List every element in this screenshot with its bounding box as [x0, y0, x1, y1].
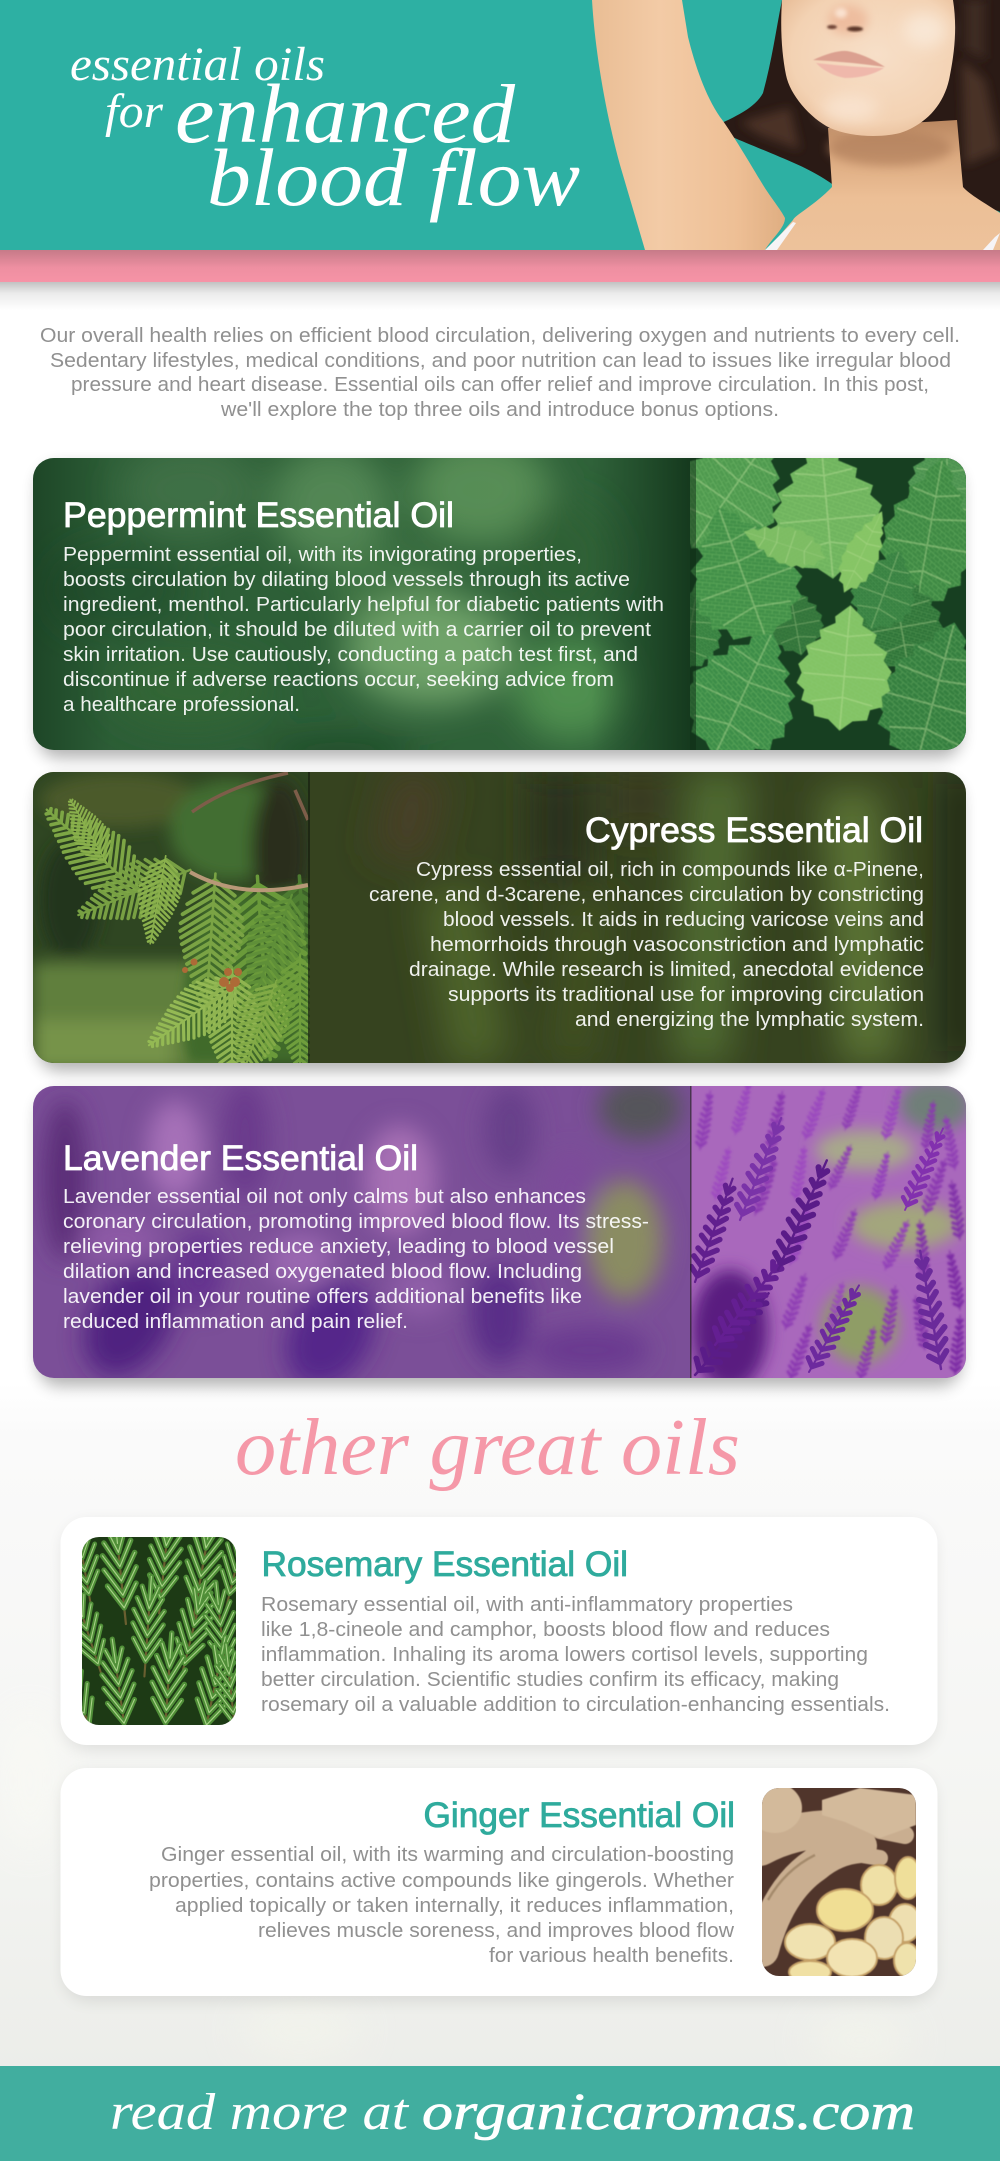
panel: ginger [60, 1768, 938, 2001]
body text: rosemary oil a valuable addition to circulation-enhancing essentials. [261, 1694, 890, 1716]
title [70, 38, 580, 223]
heading: Ginger Essential Oil [424, 1796, 735, 1835]
body text [369, 859, 924, 1031]
hair highlights [740, 0, 1000, 165]
ginger photo [762, 1788, 916, 1976]
title line: enhanced: enhanced [175, 68, 516, 161]
body text: reduced inflammation and pain relief. [63, 1311, 408, 1333]
chin highlight [822, 94, 878, 122]
hair [713, 0, 1000, 225]
photo: woman with raised arm [592, 0, 1000, 250]
body text: boosts circulation by dilating blood vessels through its active [63, 569, 630, 591]
title line: for: for [105, 85, 163, 138]
band shadow [0, 282, 1000, 310]
pink band [0, 250, 1000, 282]
body text: poor circulation, it should be diluted with a carrier oil to prevent [63, 619, 651, 641]
footer text: organicaromas.com: organicaromas.com [422, 2084, 915, 2141]
body text: Cypress essential oil, rich in compounds like α-Pinene, [416, 859, 924, 881]
body text [63, 544, 664, 716]
foliage shade [183, 885, 310, 1063]
body text: inflammation. Inhaling its aroma lowers cortisol levels, supporting [261, 1644, 868, 1666]
body text: Lavender essential oil not only calms but also enhances [63, 1186, 586, 1208]
body text: relieves muscle soreness, and improves blood flow [258, 1920, 735, 1942]
flower spikes [686, 1114, 952, 1383]
body text: and energizing the lymphatic system. [575, 1009, 924, 1031]
heading: Lavender Essential Oil [63, 1139, 418, 1178]
intro paragraph: pressure and heart disease. Essential oils can offer relief and improve circulation. In this post, [71, 374, 929, 396]
heading: Cypress Essential Oil [585, 811, 923, 850]
panel: peppermint [28, 456, 970, 768]
footer banner [0, 2066, 1000, 2161]
title line: blood flow: blood flow [207, 132, 580, 223]
face highlight [903, 12, 947, 48]
body text: supports its traditional use for improving circulation [448, 984, 924, 1006]
blurred olive background [33, 772, 966, 1063]
body text [149, 1844, 735, 1967]
intro paragraph: Our overall health relies on efficient blood circulation, delivering oxygen and nutrients to every cell. [40, 325, 960, 347]
panel: cypress [28, 772, 966, 1087]
panel: rosemary [60, 1537, 938, 1752]
body text: relieving properties reduce anxiety, leading to blood vessel [63, 1236, 614, 1258]
body text: better circulation. Scientific studies confirm its efficacy, making [261, 1669, 839, 1691]
face [781, 0, 955, 136]
cypress branch photo [33, 772, 310, 1063]
card shadow [38, 466, 961, 758]
body text: hemorrhoids through vasoconstriction and lymphatic [430, 934, 924, 956]
chin shadow [828, 130, 952, 166]
teal background [0, 0, 1000, 250]
body text: applied topically or taken internally, it reduces inflammation, [175, 1895, 734, 1917]
heading: Peppermint Essential Oil [63, 496, 454, 535]
blurred purple background [33, 1086, 966, 1378]
body text: discontinue if adverse reactions occur, seeking advice from [63, 669, 614, 691]
body text: for various health benefits. [489, 1945, 734, 1967]
body text: like 1,8-cineole and camphor, boosts blood flow and reduces [261, 1619, 830, 1641]
neck and shoulders [767, 120, 1000, 250]
body text: dilation and increased oxygenated blood flow. Including [63, 1261, 582, 1283]
intro paragraph: Sedentary lifestyles, medical conditions, and poor nutrition can lead to issues like irregular blood [50, 350, 951, 372]
strap left [765, 222, 796, 250]
strap right [983, 233, 1000, 250]
branch front [190, 872, 308, 890]
body text: properties, contains active compounds like gingerols. Whether [149, 1870, 734, 1892]
body text: a healthcare professional. [63, 694, 300, 716]
card [60, 1768, 938, 1996]
soft background spikes [695, 1081, 966, 1382]
card shadow [63, 1773, 935, 2001]
heading: Rosemary Essential Oil [262, 1545, 628, 1584]
body text: blood vessels. It aids in reducing varicose veins and [443, 909, 924, 931]
nose [827, 5, 868, 35]
body text: Peppermint essential oil, with its invigorating properties, [63, 544, 582, 566]
cones [182, 958, 242, 992]
body text: ingredient, menthol. Particularly helpful for diabetic patients with [63, 594, 664, 616]
mint leaves photo [690, 458, 966, 750]
body text: lavender oil in your routine offers additional benefits like [63, 1286, 582, 1308]
body text [261, 1594, 890, 1716]
body text: Rosemary essential oil, with anti-inflammatory properties [261, 1594, 793, 1616]
body text: drainage. While research is limited, anecdotal evidence [409, 959, 924, 981]
header banner [0, 0, 1000, 310]
intro paragraph: we'll explore the top three oils and introduce bonus options. [220, 399, 779, 421]
panel: lavender [33, 1076, 971, 1403]
footer text: read more at: read more at [110, 2084, 410, 2141]
lips [813, 51, 885, 78]
body text: coronary circulation, promoting improved blood flow. Its stress- [63, 1211, 649, 1233]
body text [63, 1186, 649, 1333]
card [60, 1517, 938, 1745]
body text: Ginger essential oil, with its warming and circulation-boosting [161, 1844, 734, 1866]
card shadow [38, 780, 961, 1071]
intro paragraph [40, 325, 960, 421]
branch [192, 773, 308, 820]
rosemary photo [82, 1537, 236, 1725]
lavender flowers photo [686, 1079, 971, 1390]
card shadow [63, 1522, 935, 1750]
arm [592, 0, 785, 250]
background faded flower field [0, 1710, 910, 2068]
card shadow [38, 1094, 961, 1386]
body text: carene, and d-3carene, enhances circulation by constricting [369, 884, 924, 906]
footer background [0, 2066, 1000, 2161]
fronds [44, 798, 310, 1063]
title line: essential oils: essential oils [70, 38, 325, 91]
blurred green background [33, 458, 966, 750]
heading: other great oils: other great oils [235, 1404, 740, 1492]
body text: skin irritation. Use cautiously, conducting a patch test first, and [63, 644, 638, 666]
